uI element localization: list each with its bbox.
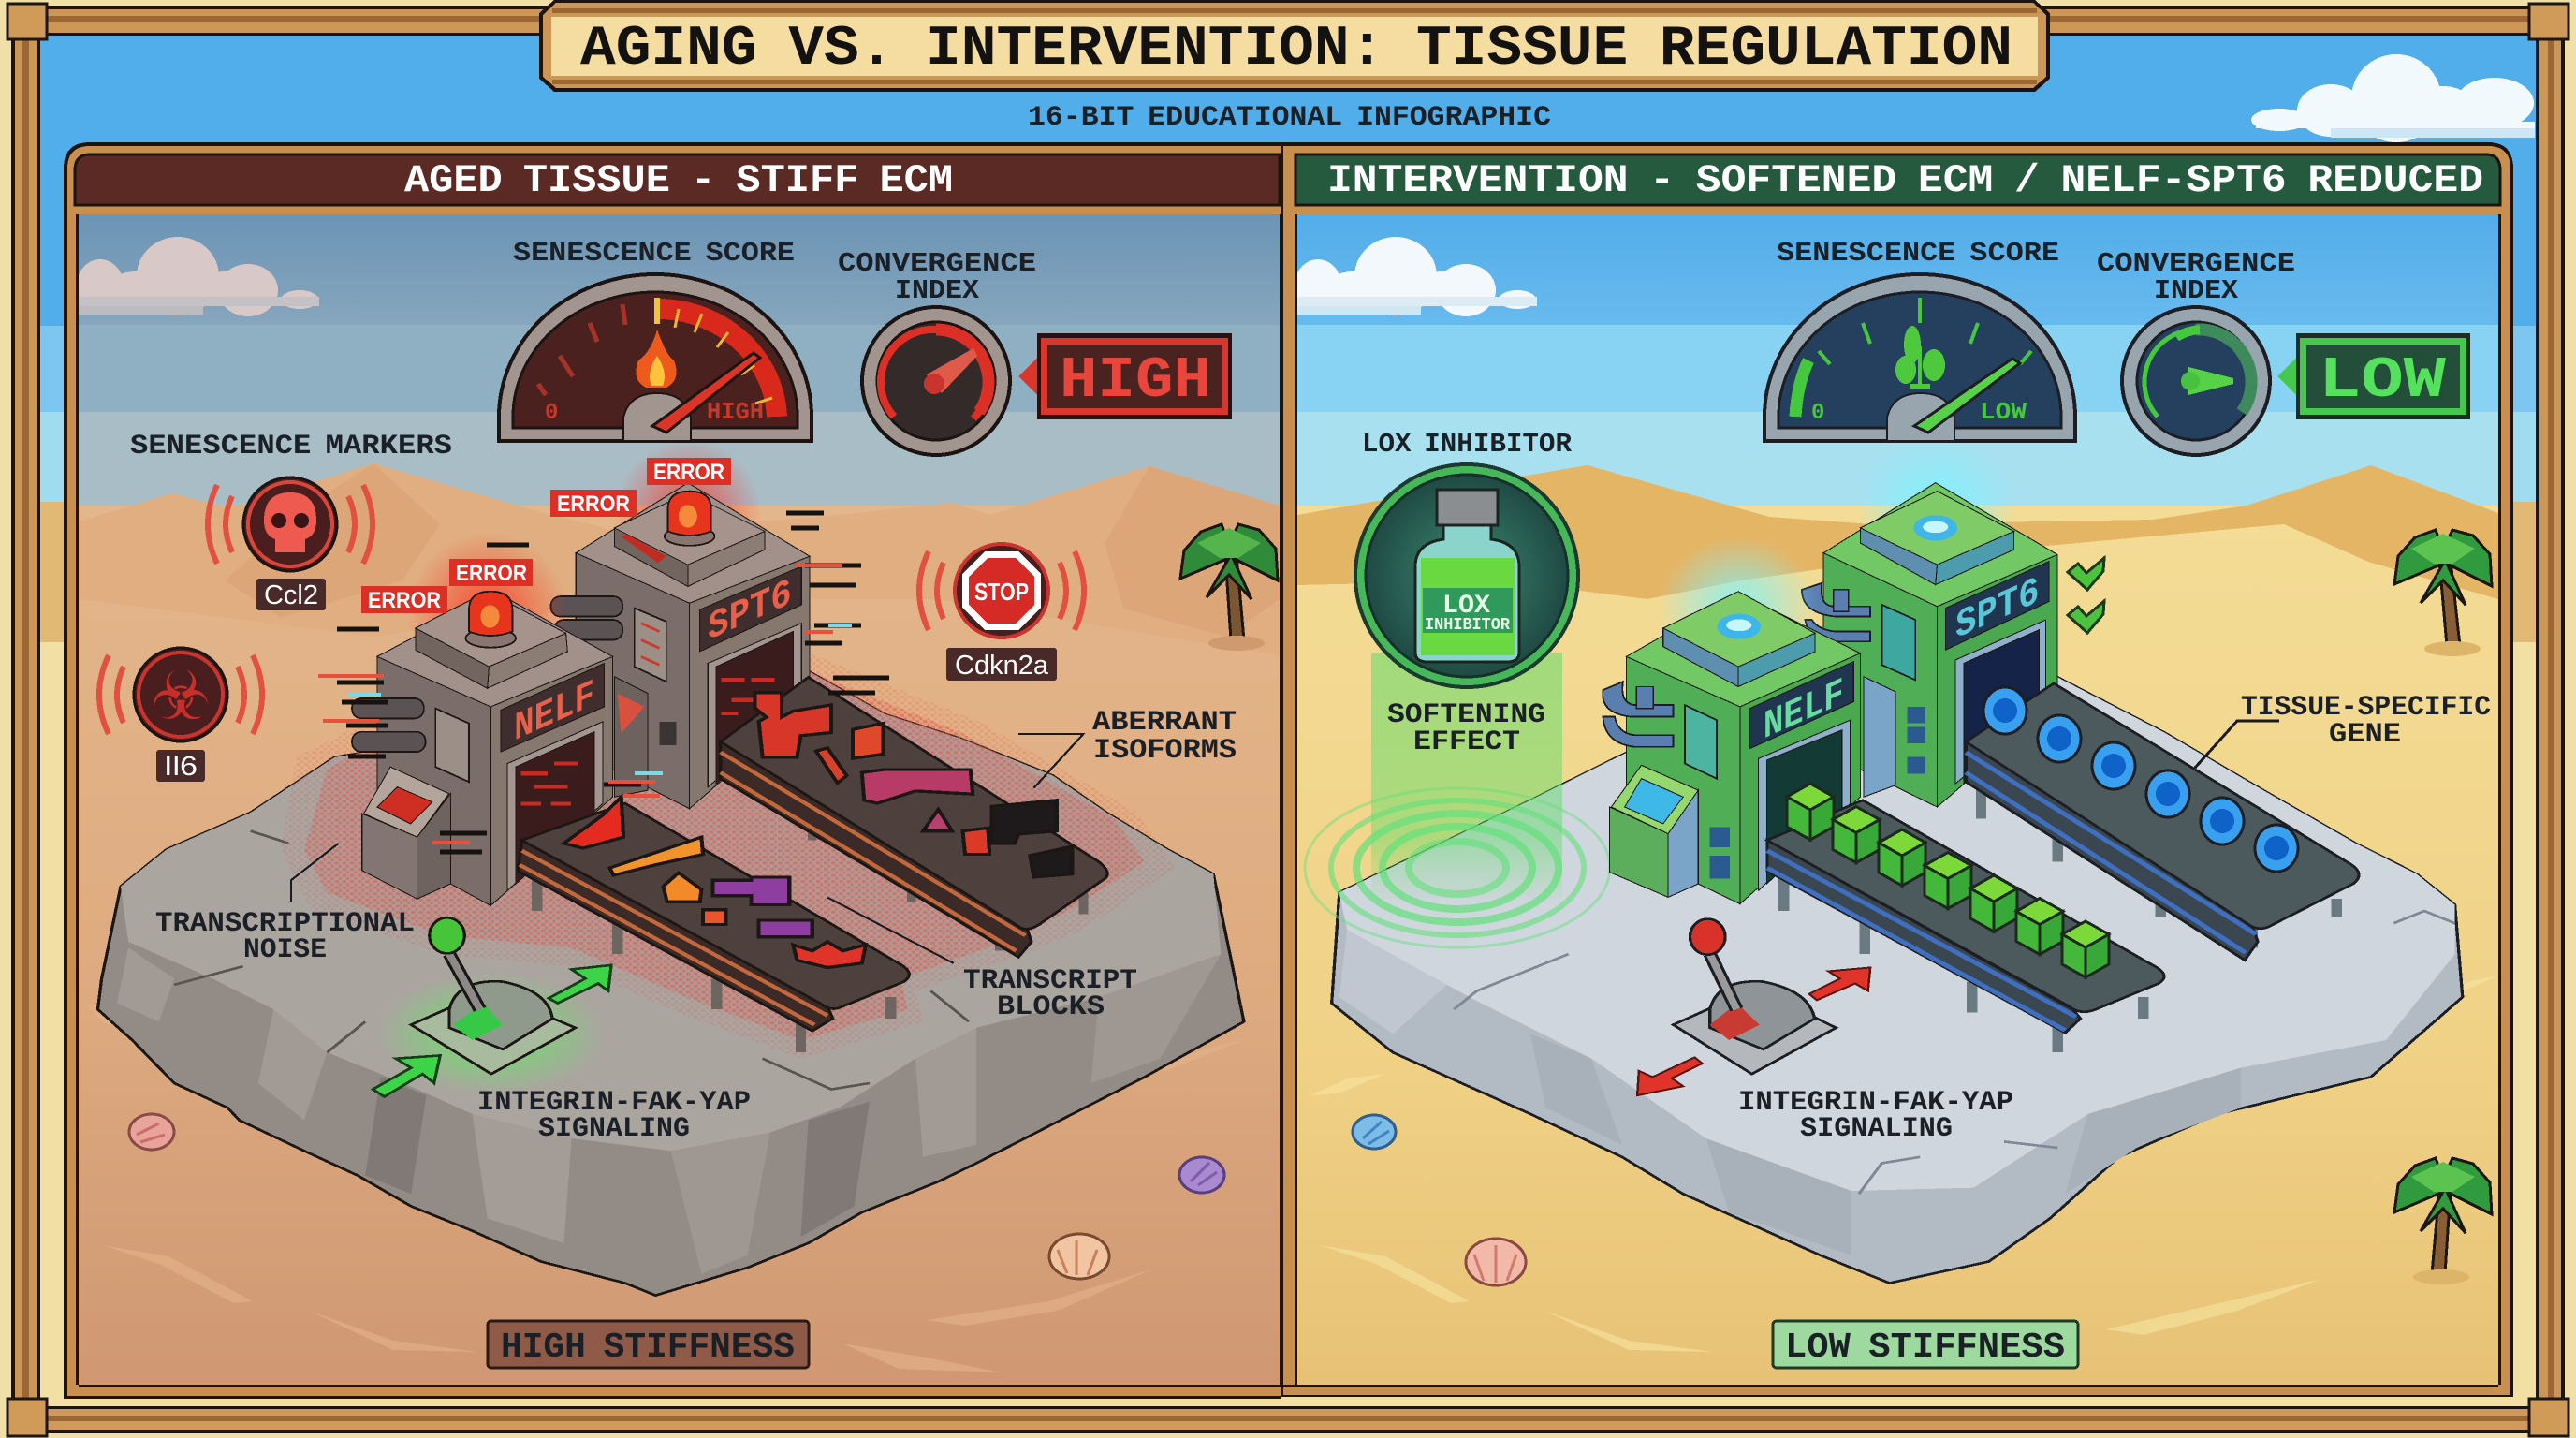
label: transcript blocks: TRANSCRIPT xyxy=(963,965,1137,997)
terminal: NELF aged xyxy=(362,767,450,899)
machine: SPT6 intervention: SPT6 xyxy=(1955,569,2039,651)
badge: low stiffness: LOW STIFFNESS xyxy=(1785,1328,2065,1368)
mechanosensing lever: active green xyxy=(373,917,611,1096)
needle low xyxy=(1914,359,2020,433)
mechanosensing lever: inactive red xyxy=(1637,919,1870,1095)
conveyor: front belt aged xyxy=(518,797,909,1052)
label: Il6 xyxy=(156,750,205,782)
label: Il6: Il6 xyxy=(164,752,198,782)
label: convergence index aged: CONVERGENCE xyxy=(838,248,1036,279)
shell: pink intervention xyxy=(1466,1239,1526,1285)
terminal: NELF intervention xyxy=(1610,765,1698,897)
error flags xyxy=(361,458,731,613)
softening beam from LOX inhibitor xyxy=(1371,653,1562,899)
soft rock platform xyxy=(1332,677,2463,1284)
label: Ccl2: Ccl2 xyxy=(264,580,318,610)
conveyor: rear belt intervention xyxy=(1966,683,2359,961)
label: tissue-specific gene: TISSUE-SPECIFIC xyxy=(2241,692,2491,724)
alarm beacon: NELF xyxy=(465,592,516,648)
label: senescence score aged: SENESCENCE SCORE xyxy=(513,238,795,269)
cloud: top right sky xyxy=(2251,54,2535,142)
heading: aged tissue: AGED TISSUE - STIFF ECM xyxy=(404,158,953,203)
label: softening effect: SOFTENING xyxy=(1387,699,1545,731)
icon: LOX inhibitor bottle: INHIBITOR xyxy=(1425,616,1510,635)
label: integrin signaling intervention: SIGNALING xyxy=(1800,1113,1953,1145)
label: integrin signaling aged: INTEGRIN-FAK-YAP xyxy=(477,1087,751,1119)
alarm beacon: SPT6 xyxy=(665,492,714,546)
error flag 4: ERROR xyxy=(368,588,441,613)
green transcript cubes xyxy=(1787,784,2109,977)
label: aberrant isoforms xyxy=(1092,712,1236,758)
label: convergence index aged xyxy=(838,248,1036,306)
shell: pink xyxy=(129,1114,174,1150)
title text: AGING VS. INTERVENTION: TISSUE REGULATION xyxy=(580,18,2012,81)
label: integrin signaling intervention xyxy=(1738,1087,2013,1145)
flame icon xyxy=(636,330,677,388)
label: transcriptional noise: TRANSCRIPTIONAL xyxy=(155,908,415,940)
machine: NELF aged: NELF xyxy=(514,672,594,753)
tissue-specific gene discs xyxy=(1983,687,2298,872)
softening ripples xyxy=(1305,788,1610,947)
dunes: intervention panel xyxy=(1297,465,2498,599)
cloud: aged panel xyxy=(77,237,319,316)
label: convergence index intervention: CONVERGENCE xyxy=(2097,248,2295,279)
panel frame fill: intervention xyxy=(1283,146,2510,1396)
error flag 3: ERROR xyxy=(456,561,527,586)
panel frame fill: aged xyxy=(67,146,1281,1396)
red noise dither xyxy=(281,653,1175,1059)
aberrant isoforms: rear belt xyxy=(755,693,1072,877)
label: LOX inhibitor: LOX INHIBITOR xyxy=(1362,429,1573,460)
error flag 1: ERROR xyxy=(653,460,724,485)
palm: aged panel xyxy=(1180,524,1278,651)
label: softening effect: EFFECT xyxy=(1413,726,1520,758)
heading: intervention: INTERVENTION - SOFTENED ECM / NELF-SPT6 REDUCED xyxy=(1327,158,2483,203)
gauge: convergence index high xyxy=(862,307,1010,455)
label: convergence index intervention xyxy=(2097,248,2295,306)
label: Cdkn2a: Cdkn2a xyxy=(955,651,1049,681)
machine: SPT6 intervention xyxy=(1802,436,2057,807)
label: aberrant isoforms: ISOFORMS xyxy=(1093,735,1237,767)
stiff rock platform xyxy=(97,653,1244,1296)
error flag 2: ERROR xyxy=(557,492,630,517)
label: senescence score intervention: SENESCENCE SCORE xyxy=(1777,238,2059,269)
header bar: intervention xyxy=(1295,154,2500,205)
gauge: convergence index low xyxy=(2122,307,2270,455)
shell: purple xyxy=(1179,1157,1224,1193)
machine: NELF intervention xyxy=(1603,536,1860,904)
conveyor: front belt intervention xyxy=(1767,800,2164,1052)
header bar: aged xyxy=(75,154,1280,205)
gauge: senescence score low: LOW xyxy=(1980,398,2027,426)
icon: LOX inhibitor bottle xyxy=(1354,462,1580,689)
badge: high stiffness: HIGH STIFFNESS xyxy=(501,1328,795,1368)
marker: Cdkn2a stop: STOP xyxy=(974,578,1029,606)
badge: LOW: LOW xyxy=(2319,347,2447,414)
heading: senescence markers: SENESCENCE MARKERS xyxy=(130,431,452,462)
sprout icon xyxy=(1895,326,1945,389)
gauge: senescence score low: 0 xyxy=(1811,401,1824,426)
palm: intervention lower xyxy=(2394,1158,2492,1284)
leader line: tissue-specific gene xyxy=(2195,721,2279,768)
conveyor: rear belt aged xyxy=(721,677,1107,957)
machine: NELF aged xyxy=(352,533,613,905)
sand streaks: intervention panel xyxy=(1310,976,2498,1352)
title plaque xyxy=(539,0,2050,92)
label: tissue-specific gene xyxy=(2241,692,2491,751)
scene: aged tissue xyxy=(77,214,1280,1386)
transcript blocks: front belt xyxy=(564,797,866,967)
shell: blue xyxy=(1353,1115,1396,1149)
gauge: senescence score high xyxy=(499,274,812,441)
label: aberrant isoforms: ABERRANT xyxy=(1092,707,1237,739)
marker: Il6 biohazard: ☣ xyxy=(151,656,211,735)
arrow: upper green xyxy=(549,965,611,1004)
arrow: lower green xyxy=(373,1055,440,1096)
sand streaks: aged panel xyxy=(104,1064,1183,1372)
palm: intervention upper xyxy=(2394,530,2492,656)
gauge: senescence score high: HIGH xyxy=(707,398,764,426)
glitch noise streaks xyxy=(318,513,889,852)
arrow: lower red xyxy=(1637,1057,1703,1095)
label: transcript blocks: BLOCKS xyxy=(997,991,1105,1023)
label: integrin signaling intervention: INTEGRIN-FAK-YAP xyxy=(1738,1087,2013,1119)
machine: SPT6 aged xyxy=(550,439,810,809)
panel frame: intervention xyxy=(1281,142,2513,1399)
panel: aged tissue xyxy=(64,142,1281,1399)
label: convergence index aged: INDEX xyxy=(895,275,980,306)
needle high xyxy=(652,353,760,433)
label: softening effect xyxy=(1387,699,1545,758)
marker: Il6 biohazard xyxy=(99,648,262,782)
shell: peach xyxy=(1049,1234,1109,1279)
panel frame: aged xyxy=(64,142,1281,1399)
label: transcriptional noise xyxy=(155,912,414,957)
gauge: senescence score high: 0 xyxy=(545,401,558,426)
checkmarks xyxy=(2068,558,2104,633)
marker: Ccl2 skull xyxy=(208,477,373,610)
machine: SPT6 aged: SPT6 xyxy=(708,570,792,653)
badge: LOW xyxy=(2277,333,2470,419)
cloud: intervention panel xyxy=(1295,237,1537,316)
arrow: upper red xyxy=(1809,967,1870,1000)
label: transcriptional noise: NOISE xyxy=(243,934,327,966)
badge: HIGH: HIGH xyxy=(1060,347,1211,414)
panel: intervention xyxy=(1281,142,2513,1399)
scene: intervention xyxy=(1295,214,2498,1386)
label: integrin signaling aged: SIGNALING xyxy=(538,1113,690,1145)
leader lines: aged xyxy=(291,734,1084,963)
badge: HIGH xyxy=(1018,333,1232,419)
label: integrin signaling aged xyxy=(479,1091,750,1137)
subtitle: 16-BIT EDUCATIONAL INFOGRAPHIC xyxy=(1028,102,1551,134)
icon: LOX inhibitor bottle: LOX xyxy=(1442,592,1490,621)
label: transcript blocks xyxy=(964,969,1136,1015)
gauge: senescence score low xyxy=(1764,274,2075,441)
panel footer frame line xyxy=(76,214,2501,1387)
label: convergence index intervention: INDEX xyxy=(2154,275,2239,306)
label: tissue-specific gene: GENE xyxy=(2329,719,2401,751)
dunes: aged panel xyxy=(79,463,1280,655)
machine: NELF intervention: NELF xyxy=(1764,670,1844,751)
marker: Cdkn2a stop xyxy=(919,544,1084,681)
